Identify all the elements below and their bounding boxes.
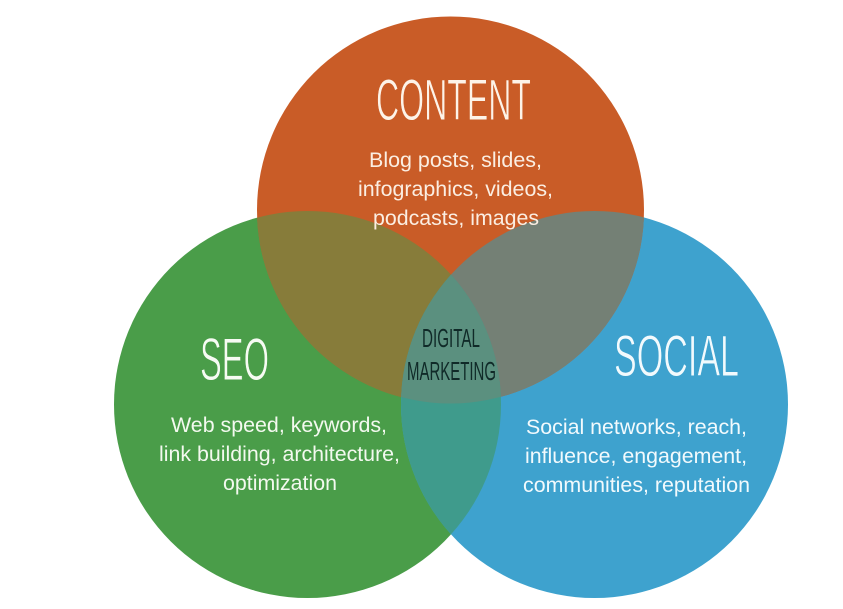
text: content items: Blog posts, slides, — [369, 149, 542, 172]
heading: social: SOCIAL — [614, 324, 739, 389]
label: digital marketing: MARKETING — [407, 356, 496, 386]
circle: social — [401, 211, 788, 598]
text: social items: Social networks, reach, — [526, 416, 747, 439]
venn diagram — [114, 16, 788, 598]
text: social items — [523, 416, 750, 497]
overlap: SEO and social — [401, 274, 501, 534]
overlap: content and social — [402, 211, 644, 397]
text: SEO items: link building, architecture, — [159, 443, 400, 466]
text: content items: infographics, videos, — [358, 178, 553, 201]
overlap: center — [401, 275, 500, 404]
text: content items: podcasts, images — [373, 207, 539, 230]
text: SEO items — [159, 414, 400, 495]
text: social items: influence, engagement, — [525, 445, 747, 468]
label: digital marketing: DIGITAL — [422, 323, 480, 353]
text: social items: communities, reputation — [523, 474, 750, 497]
overlap: content and SEO — [257, 211, 451, 397]
label: digital marketing — [407, 323, 496, 386]
text: SEO items: Web speed, keywords, — [171, 414, 387, 437]
circle: SEO — [114, 211, 501, 598]
heading: content: CONTENT — [376, 68, 531, 133]
text: content items — [358, 149, 553, 230]
circle: content — [257, 16, 644, 404]
text: SEO items: optimization — [223, 472, 337, 495]
heading: SEO: SEO — [200, 326, 269, 393]
